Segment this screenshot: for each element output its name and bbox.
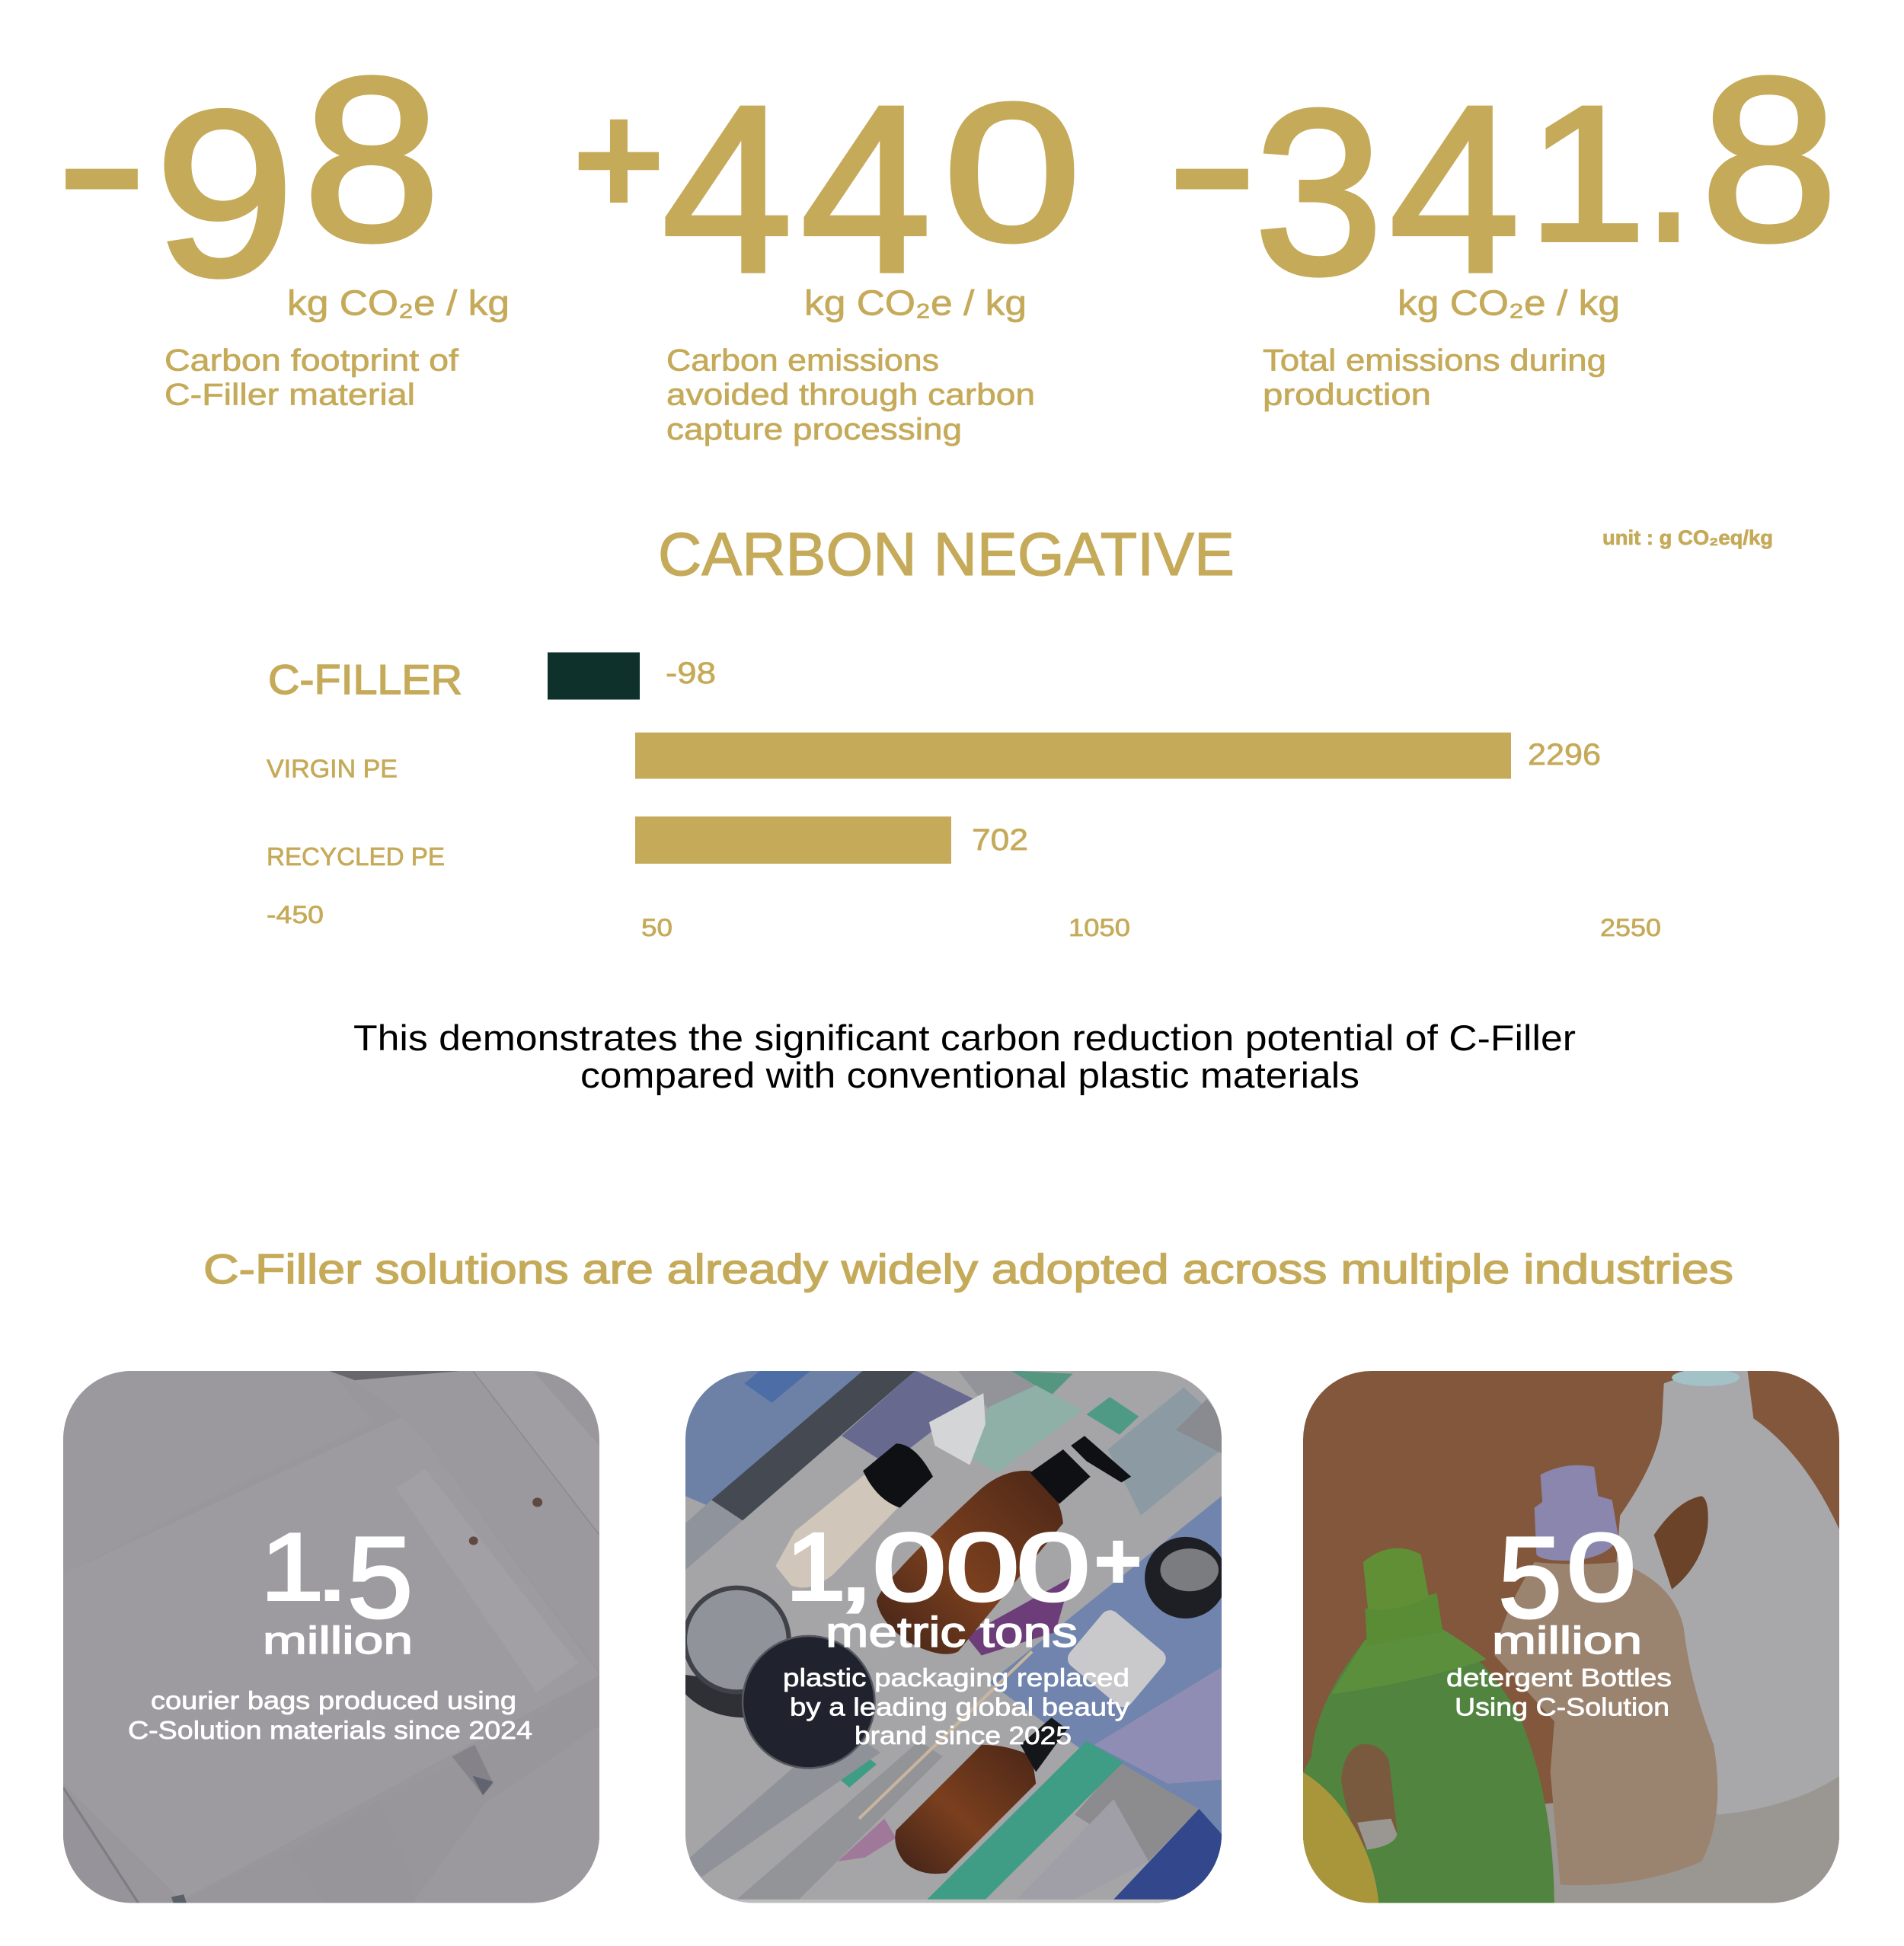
- big number -341.8: 4: [1389, 56, 1520, 321]
- unit: million: million: [1492, 1619, 1642, 1662]
- foundation tube: [775, 1473, 898, 1588]
- big number +440: 0: [944, 63, 1081, 282]
- axis labels: 1050: [1069, 914, 1130, 941]
- big number 1,000+: 1: [786, 1514, 845, 1620]
- dropper bottle: [895, 1745, 1036, 1874]
- stat: -98: [56, 29, 510, 411]
- row: Recycled PE: [267, 816, 1028, 871]
- description: Carbon emissions: [666, 344, 939, 378]
- unit: million: million: [263, 1619, 413, 1662]
- row: Virgin PE: 2296: [1528, 738, 1601, 772]
- row: C-Filler: [268, 652, 716, 703]
- big number +440: [574, 56, 1081, 321]
- description: [666, 344, 1035, 446]
- description: Total emissions during: [1263, 344, 1606, 378]
- big number -341.8: [1167, 25, 1838, 323]
- description: avoided through carbon: [666, 378, 1035, 411]
- big number -98: -: [56, 50, 147, 276]
- cotton swab: [859, 1651, 1032, 1819]
- big number 1,000+: +: [1095, 1519, 1141, 1604]
- big number -98: 8: [303, 29, 440, 289]
- panel: courier bags: [63, 1371, 599, 1903]
- row: Virgin PE: VIRGIN PE: [267, 755, 398, 783]
- big number 1.5: .: [316, 1525, 348, 1618]
- big number 50: 5: [1498, 1513, 1562, 1642]
- compact lid right: [1145, 1537, 1226, 1618]
- photo: cosmetic bottles: [682, 1368, 1226, 1908]
- axis labels: 2550: [1600, 914, 1661, 941]
- sponge square: [1068, 1610, 1166, 1708]
- description: [165, 344, 459, 411]
- axis labels: [267, 901, 1661, 941]
- row: C-Filler: C-FILLER: [268, 656, 462, 703]
- background stripes: [685, 1370, 915, 1520]
- description: capture processing: [666, 413, 962, 446]
- chart title: CARBON NEGATIVE: [658, 520, 1235, 588]
- big number 1,000+: ,: [839, 1510, 874, 1621]
- row: C-Filler: -98: [666, 657, 716, 690]
- black lid: [743, 1636, 874, 1768]
- description: Carbon footprint of: [165, 344, 459, 378]
- big number -341.8: 3: [1254, 61, 1383, 323]
- unit label: kg CO₂e / kg: [287, 283, 510, 323]
- unit: metric tons: metric tons: [826, 1608, 1078, 1656]
- caption: Using C-Solution: [1455, 1692, 1669, 1721]
- caption: courier bags produced using: [151, 1686, 516, 1714]
- conclusion text: This demonstrates the significant carbon reduction potential of C-Filler: [353, 1018, 1576, 1058]
- description: C-Filler material: [165, 378, 415, 411]
- conclusion text: [353, 1018, 1576, 1095]
- unit label: kg CO₂e / kg: [804, 283, 1027, 323]
- caption: brand since 2025: [855, 1721, 1072, 1749]
- white bottle: [1610, 1370, 1845, 1815]
- axis labels: -450: [267, 901, 324, 928]
- green bottle: [1303, 1628, 1554, 1908]
- unit label: kg CO₂e / kg: [1398, 283, 1620, 323]
- section heading: C-Filler solutions are already widely adopted across multiple industries: [203, 1245, 1733, 1293]
- pump bottle: [877, 1471, 1063, 1654]
- sponge wedge: [929, 1393, 986, 1465]
- big number 1.5: 1: [260, 1513, 324, 1621]
- photo: detergent bottles: [1299, 1368, 1845, 1908]
- big number 1.5: [260, 1513, 414, 1642]
- big number 1,000+: 0: [873, 1514, 946, 1621]
- row: Virgin PE: [267, 733, 1601, 783]
- caption: plastic packaging replaced: [783, 1663, 1129, 1692]
- big number -341.8: -: [1167, 50, 1257, 276]
- row: Recycled PE: RECYCLED PE: [267, 842, 445, 871]
- big number -341.8: .: [1644, 25, 1693, 290]
- photo: courier bags: [63, 1371, 599, 1903]
- caption: [1446, 1663, 1672, 1721]
- big number 1,000+: 0: [946, 1514, 1019, 1621]
- caption: C-Solution materials since 2024: [128, 1716, 532, 1744]
- big number -98: 9: [155, 62, 295, 324]
- big number 50: 0: [1567, 1514, 1636, 1622]
- description: [1263, 344, 1606, 411]
- big number +440: +: [574, 72, 663, 246]
- big number 1,000+: 0: [1017, 1514, 1090, 1621]
- description: production: [1263, 378, 1431, 411]
- panel: beauty packaging: [682, 1368, 1226, 1908]
- peach bottle: [1494, 1562, 1717, 1885]
- big number 1.5: 5: [347, 1513, 414, 1642]
- axis labels: 50: [641, 914, 672, 941]
- bar chart: [267, 652, 1661, 941]
- stat: -341.8: [1167, 25, 1838, 411]
- big number 1,000+: [786, 1510, 1141, 1621]
- caption: by a leading global beauty: [790, 1692, 1130, 1721]
- big number -98: [56, 29, 440, 324]
- big number -341.8: 8: [1701, 29, 1838, 289]
- caption: [128, 1686, 532, 1744]
- big number -341.8: 1: [1528, 66, 1646, 281]
- big number +440: 4: [662, 56, 793, 321]
- caption: [783, 1663, 1130, 1749]
- caption: detergent Bottles: [1446, 1663, 1672, 1692]
- big number +440: 4: [800, 56, 931, 321]
- stat: +440: [574, 56, 1081, 446]
- open jar left: [685, 1675, 745, 1718]
- unit note: unit : g CO₂eq/kg: [1602, 526, 1773, 549]
- yellow bottle: [1299, 1770, 1379, 1908]
- big number 50: [1498, 1513, 1636, 1642]
- row: Recycled PE: 702: [972, 823, 1028, 857]
- panel: detergent bottles: [1299, 1368, 1845, 1908]
- floor: [1299, 1772, 1845, 1908]
- conclusion text: compared with conventional plastic materials: [580, 1055, 1359, 1095]
